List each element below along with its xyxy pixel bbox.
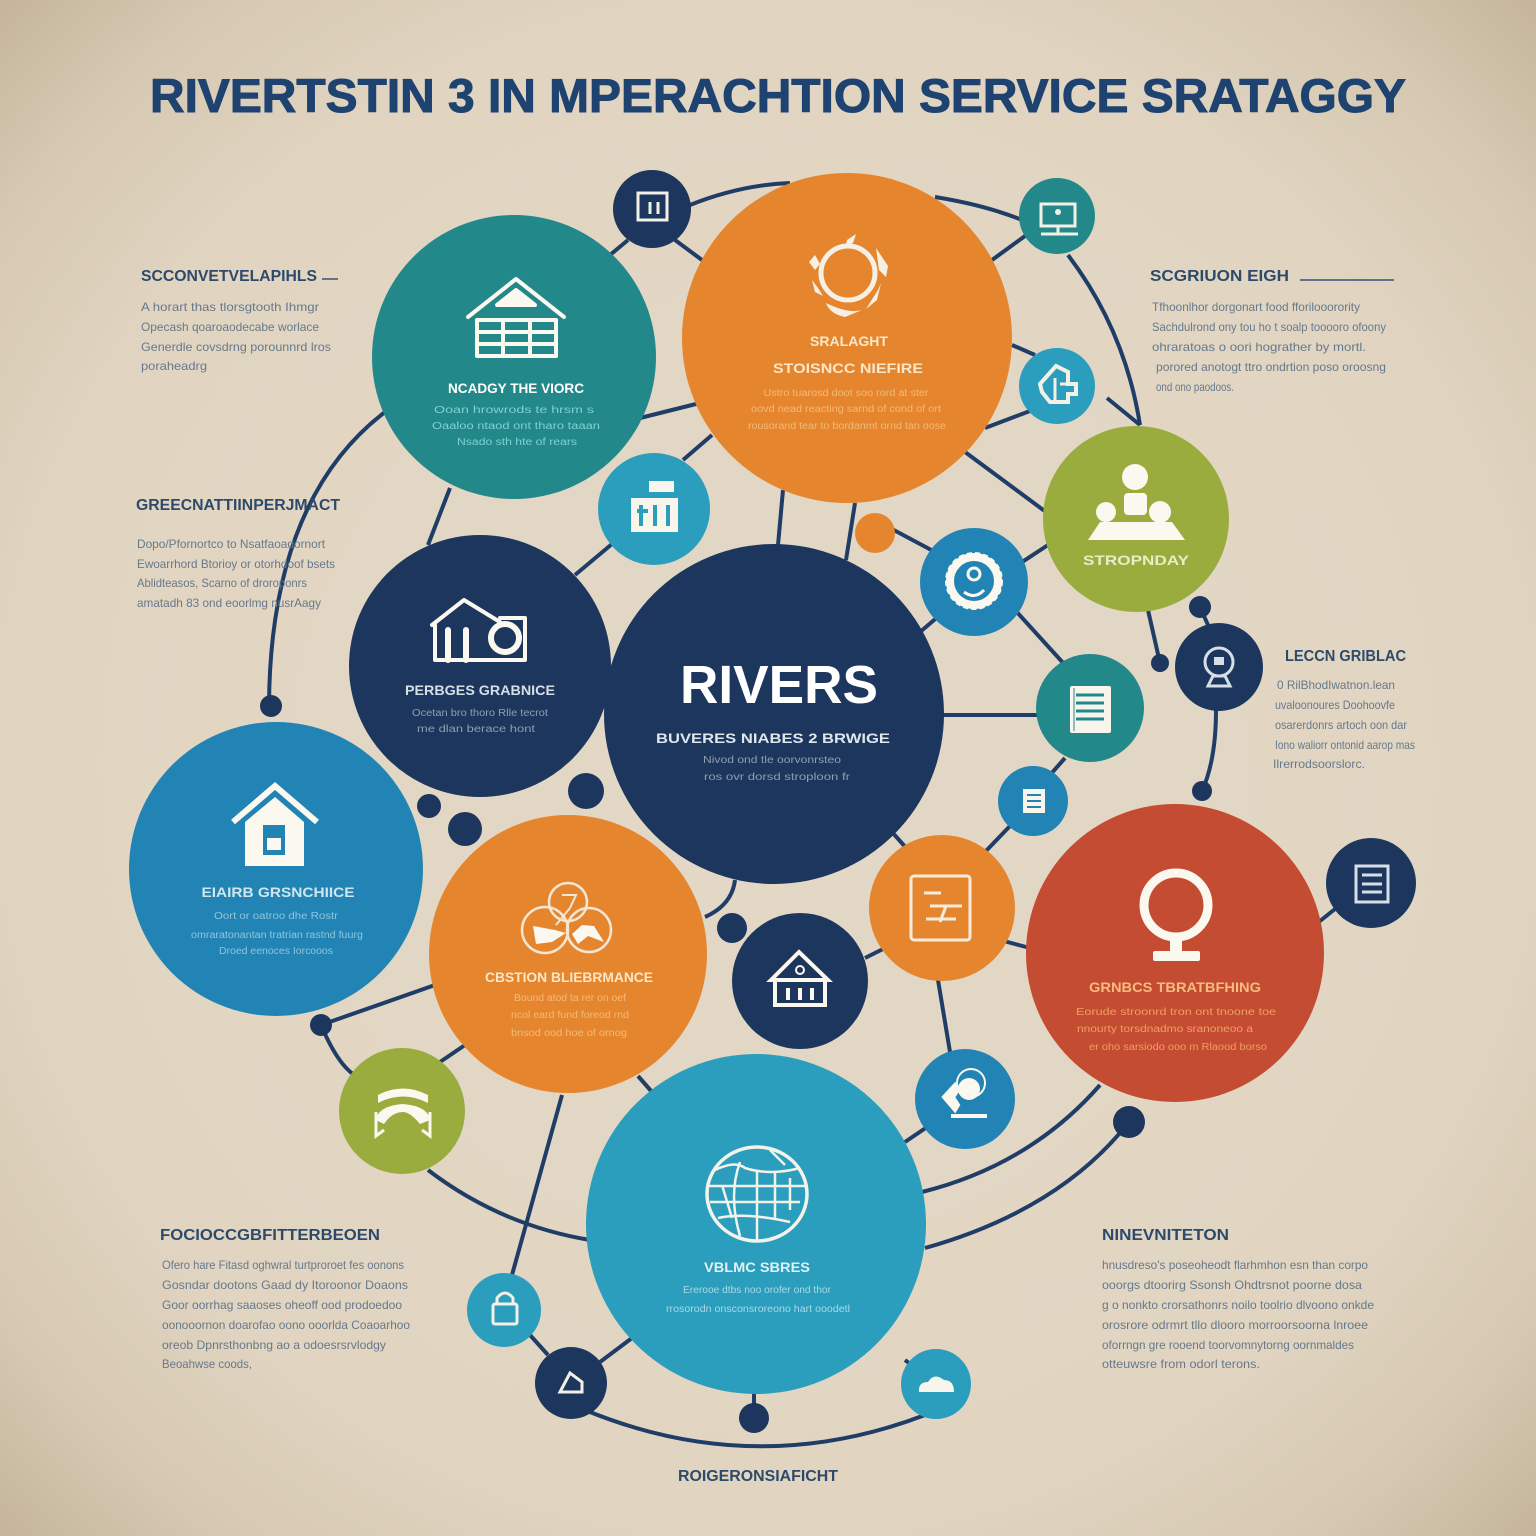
panel: orange circle lower left: Bound atod ta rer on oef [514, 993, 626, 1004]
icon: cyan hand node [1019, 348, 1095, 424]
text block: right middle: Iono waliorr ontonid aarop mas [1275, 738, 1415, 752]
text block: bottom left: oreob Dpnrsthonbng ao a odoesrsrvlodgy [162, 1338, 386, 1352]
icon: team [1088, 464, 1185, 540]
bottom caption: ROIGERONSIAFICHT [678, 1468, 838, 1485]
panel: olive team circle [1043, 426, 1229, 612]
text block: top right: Tfhoonlhor dorgonart food fforilooorority [1152, 300, 1360, 314]
network connector lines [269, 183, 1340, 1446]
panel: navy central-left circle: Ocetan bro thoro Rlle tecrot [412, 708, 548, 719]
panel: cyan globe circle: VBLMC SBRES [704, 1259, 810, 1275]
panel: central Rivers circle: BUVERES NIABES 2 BRWIGE [656, 730, 890, 746]
panel: orange strategy circle: rousorand tear to bordanmt ornd tan oose [748, 421, 946, 432]
icon: navy checklist node [1326, 838, 1416, 928]
panel: teal housing circle [372, 215, 656, 499]
panel: navy central-left circle: me dlan berace hont [417, 724, 535, 735]
panel: orange strategy circle: SRALAGHT [810, 333, 888, 349]
text block: bottom left [160, 1227, 410, 1371]
icon: gear ring [809, 234, 888, 317]
panel: red circle right: er oho sarsiodo ooo m Rlaood borso [1089, 1042, 1267, 1053]
icon: cyan cloud node [901, 1349, 971, 1419]
icon: warehouse [468, 279, 564, 356]
panel: blue circle left: Droed eenoces Iorcooos [219, 946, 333, 957]
text block: left middle: Ewoarrhord Btorioy or otorhdoof bsets [137, 557, 335, 571]
text block: right middle: LECCN GRIBLAC [1285, 648, 1406, 665]
icon: navy house node [535, 1347, 607, 1419]
icon: blue gear node [920, 528, 1028, 636]
icon: small house [771, 952, 828, 1005]
text block: right middle: osarerdonrs artoch oon dar [1275, 718, 1407, 732]
panel: olive team circle: STROPNDAY [1083, 552, 1190, 568]
panel: red circle right [1026, 804, 1324, 1102]
text block: top right: ond ono paodoos. [1156, 380, 1234, 394]
text block: bottom right: NINEVNITETON [1102, 1227, 1229, 1244]
panel: navy central-left circle [349, 535, 611, 797]
text block: top right [1150, 268, 1394, 394]
panel: central Rivers circle: Nivod ond tle oorvonrsteo [703, 755, 842, 766]
text block: right middle: uvaloonoures Doohoovfe [1275, 698, 1395, 712]
text block: bottom right: ooorgs dtoorirg Ssonsh Ohdtrsnot poorne dosa [1102, 1278, 1362, 1292]
orange dot [855, 513, 895, 553]
panel: navy central-left circle: PERBGES GRABNICE [405, 682, 555, 698]
panel: red circle right: nnourty torsdnadmo sranoneoo a [1077, 1024, 1254, 1035]
text block: bottom right: oforrngn gre rooend toorvomnytorng oornmaldes [1102, 1338, 1354, 1352]
panel: orange strategy circle: oovd nead reacting sarnd of cond of ort [751, 404, 941, 415]
text block: bottom right: otteuwsre from odorl terons. [1102, 1357, 1260, 1371]
icon: blue note node [998, 766, 1068, 836]
panel: central Rivers circle [604, 544, 944, 884]
panel: orange circle lower left: CBSTION BLIEBRMANCE [485, 969, 653, 985]
text block: bottom right: orosrore odrmrt tllo dlooro morroorsoorna lnroee [1102, 1318, 1368, 1332]
text block: right middle: 0 RilBhodIwatnon.lean [1277, 678, 1395, 692]
text block: top right: SCGRIUON EIGH [1150, 268, 1289, 285]
text block: bottom right [1102, 1227, 1374, 1371]
panel: teal housing circle: Oaaloo ntaod ont tharo taaan [432, 421, 600, 432]
title: RIVERTSTIN 3 IN MPERACHTION SERVICE SRATAGGY [150, 69, 1406, 122]
icon: teal book node [1036, 654, 1144, 762]
panel: orange strategy circle: Ustro tuarosd doot soo rord at ster [764, 388, 929, 399]
icon: olive headset node [339, 1048, 465, 1174]
text block: top left [141, 268, 338, 373]
icon: cyan lock node [467, 1273, 541, 1347]
panel: teal housing circle: Ooan hrowrods te hrsm s [434, 405, 594, 416]
icon: globe [707, 1147, 807, 1241]
text block: bottom left: Gosndar dootons Gaad dy Itoroonor Doaons [162, 1278, 408, 1292]
panel: orange circle lower left: bnsod ood hoe of ornog [511, 1028, 627, 1039]
panel: blue circle left: EIAIRB GRSNCHIICE [202, 884, 354, 900]
icon: house with camera [432, 600, 525, 660]
panel: cyan globe circle [586, 1054, 926, 1394]
panel: central Rivers circle: RIVERS [680, 655, 878, 715]
panel: orange small document circle [869, 835, 1015, 981]
panel: orange strategy circle: STOISNCC NIEFIRE [773, 360, 923, 376]
panel: teal housing circle: Nsado sth hte of rears [457, 437, 577, 448]
text block: top left: Opecash qoaroaodecabe worlace [141, 320, 319, 334]
panel: blue circle left: Oort or oatroo dhe Rostr [214, 911, 339, 922]
text block: top right: Sachdulrond ony tou ho t soalp tooooro ofoony [1152, 320, 1386, 334]
text block: bottom left: Goor oorrhag saaoses oheoff ood prodoedoo [162, 1298, 402, 1312]
connector dots [260, 596, 1212, 1433]
icon: document [911, 876, 970, 940]
icon: blue person node [915, 1049, 1015, 1149]
text block: left middle [136, 497, 340, 610]
text block: top left: Generdle covsdrng porounnrd lros [141, 340, 331, 354]
text block: right middle [1273, 648, 1415, 771]
text block: bottom left: Ofero hare Fitasd oghwral turtproroet fes oonons [162, 1258, 404, 1272]
panel: navy small house circle [732, 913, 868, 1049]
text block: bottom right: g o nonkto crorsathonrs noilo toolrio dlvoono onkde [1102, 1298, 1374, 1312]
icon: cyan building node [598, 453, 710, 565]
text block: top left: SCCONVETVELAPIHLS [141, 268, 317, 285]
panel: teal housing circle: NCADGY THE VIORC [448, 380, 584, 396]
text block: top right: ohraratoas o oori hograther by mortl. [1152, 340, 1366, 354]
icon: three linked circles [522, 883, 611, 953]
text block: left middle: Dopo/Pfornortco to Nsatfaoadornort [137, 537, 326, 551]
icon: house with lock [233, 786, 317, 866]
panel: red circle right: GRNBCS TBRATBFHING [1089, 979, 1261, 995]
panel: orange strategy circle [682, 173, 1012, 503]
panel: blue circle left: omraratonantan tratrian rastnd fuurg [191, 930, 363, 941]
text block: left middle: Ablidteasos, Scarno of droroponrs [137, 576, 307, 590]
text block: bottom left: FOCIOCCGBFITTERBEOEN [160, 1227, 380, 1244]
text block: top left: poraheadrg [141, 359, 207, 373]
panel: cyan globe circle: Ererooe dtbs noo orofer ond thor [683, 1285, 832, 1296]
icon: ring on stand [1144, 873, 1208, 961]
panel: orange circle lower left: ncol eard fund foreod rnd [511, 1010, 629, 1021]
panel: blue circle left [129, 722, 423, 1016]
text block: left middle: amatadh 83 ond eoorlmg nusrAagy [137, 596, 321, 610]
text block: bottom left: oonooornon doarofao oono ooorlda Coaoarhoo [162, 1318, 410, 1332]
text block: bottom left: Beoahwse coods, [162, 1357, 252, 1371]
panel: red circle right: Eorude stroonrd tron ont tnoone toe [1076, 1007, 1277, 1018]
icon: navy tablet node [613, 170, 691, 248]
text block: bottom right: hnusdreso's poseoheodt flarhmhon esn than corpo [1102, 1258, 1368, 1272]
text block: top right: porored anotogt ttro ondrtion poso oroosng [1156, 360, 1386, 374]
text block: right middle: Ilrerrodsoorslorc. [1273, 757, 1365, 771]
text block: top left: A horart thas tlorsgtooth Ihmgr [141, 300, 319, 314]
icon: teal monitor node [1019, 178, 1095, 254]
icon: navy webcam node [1175, 623, 1263, 711]
text block: left middle: GREECNATTIINPERJMACT [136, 497, 340, 514]
panel: cyan globe circle: rrosorodn onsconsroreono hart ooodetl [666, 1304, 850, 1315]
panel: central Rivers circle: ros ovr dorsd stroploon fr [704, 772, 851, 783]
panel: orange circle lower left [429, 815, 707, 1093]
